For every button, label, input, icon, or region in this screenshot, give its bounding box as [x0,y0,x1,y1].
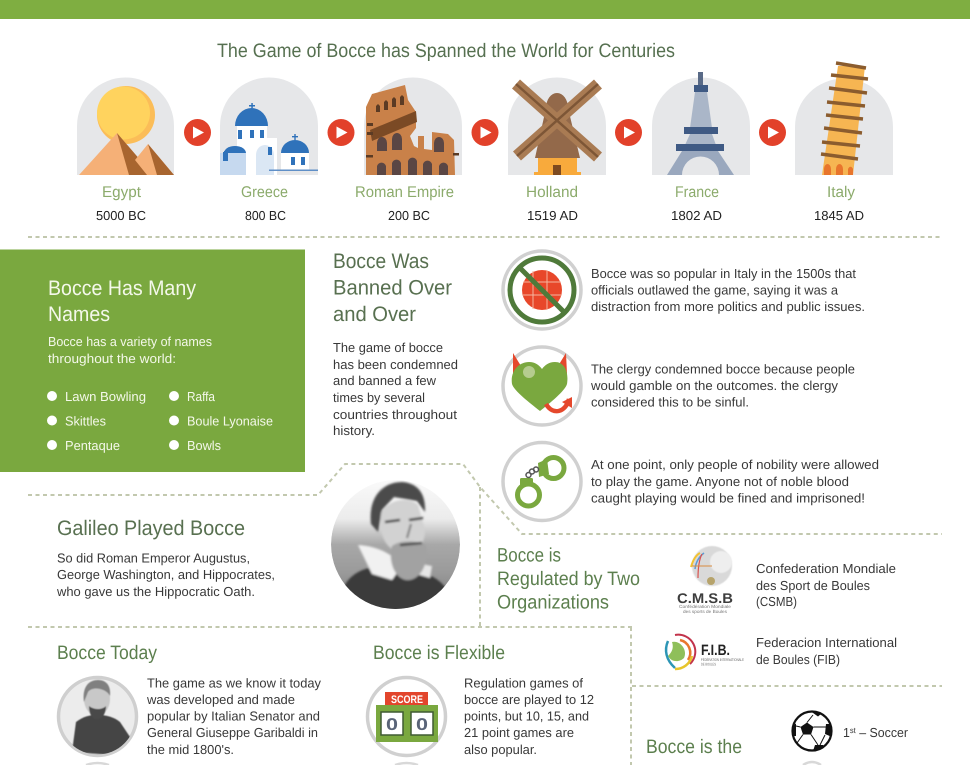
arrow: Greece to Rome [328,119,354,146]
logo: CMSB: C.M.S.B [677,590,733,606]
text: CMSB name: des Sport de Boules [756,578,870,593]
icon: Holland windmill [508,77,606,175]
label: Greece 800 BC: Greece [241,184,288,201]
text: clergy condemned gambling: The clergy condemned bocce because people [591,362,855,376]
text: FIB name: de Boules (FIB) [756,652,840,667]
arrow: Rome to Holland [472,119,498,146]
logo: CMSB: Confédération Mondiale [679,604,732,609]
text: banned summary: has been condemned [333,357,458,372]
text: CMSB name: Confederation Mondiale [756,561,896,576]
heading: Galileo Played Bocce: Galileo Played Bocce [57,517,245,540]
text: banned summary: and banned a few [333,373,437,388]
text: banned summary [333,340,458,438]
text: FIB name [756,635,897,667]
logo: FIB: DE BOULES [701,662,716,666]
logo: FIB [666,635,744,669]
timeline: history of bocce [77,63,893,223]
text: intro to names: Bocce has a variety of names [48,334,212,349]
heading: Bocce Was Banned Over and Over: Banned Over [333,276,452,300]
heading: Bocce is Flexible: Bocce is Flexible [373,642,505,664]
label: Roman Empire 200 BC: 200 BC [388,208,430,223]
text: clergy condemned gambling: would gamble on the outcomes. the clergy [590,378,839,393]
text: other famous players [56,550,275,599]
icon: banned bocce ball [503,251,581,329]
text: CMSB name [756,561,896,609]
text: outlawed in the 1500s: Bocce was so popular in Italy in the 1500s that [591,266,856,281]
heading: Bocce Was Banned Over and Over: and Over [333,303,416,326]
list: names of bocce: Bowls [187,438,221,453]
icon: scoreboard [368,678,446,756]
text: nobility only [591,457,879,506]
heading: Bocce is Regulated by Two Organizations: Bocce is [497,544,561,566]
label: Italy 1845 AD [814,184,864,223]
logo: CMSB [677,546,733,614]
icon: Egypt pyramids [77,77,174,175]
text: Bocce Today description: the mid 1800's. [147,742,234,757]
text: nobility only: to play the game. Anyone not of noble blood [591,474,849,489]
label: Holland 1519 AD [526,184,578,223]
text: nobility only: At one point, only people of nobility were allowed [591,457,879,472]
portrait: Garibaldi [58,678,136,756]
text: other famous players: So did Roman Emperor Augustus, [57,550,250,566]
text: nobility only: caught playing would be fined and imprisoned! [591,490,865,506]
text: Bocce is Flexible description: Regulation games of [464,676,583,690]
label: Italy 1845 AD: 1845 AD [814,208,864,223]
icon: Italy leaning tower [795,63,893,175]
label: Roman Empire 200 BC [355,184,454,223]
text: outlawed in the 1500s [591,266,865,314]
label: Holland 1519 AD: Holland [526,184,578,201]
panel: Bocce Has Many Names [0,250,305,472]
heading: Bocce is Regulated by Two Organizations: Regulated by Two [497,568,640,590]
arrow: Holland to France [615,119,642,146]
text: Bocce Today description: was developed and made [146,692,295,707]
heading: Bocce Was Banned Over and Over: Bocce Was [333,250,429,273]
logo: CMSB: des sports de Boules [683,609,728,614]
label: Roman Empire 200 BC: Roman Empire [355,184,454,201]
label: Holland 1519 AD: 1519 AD [527,208,578,223]
icon: Roman Colosseum [364,77,462,175]
label: Egypt 5000 BC: 5000 BC [96,208,146,223]
icon: France Eiffel Tower [652,72,750,175]
list: names of bocce: Boule Lyonaise [187,414,273,428]
heading: Bocce is Regulated by Two Organizations: Organizations [497,592,609,614]
heading: Bocce Has Many Names [48,277,196,326]
text: outlawed in the 1500s: distraction from more politics and public issues. [591,299,865,314]
text: 1st Soccer: 1 [843,725,850,740]
list: names of bocce [47,389,273,453]
text: Bocce Today description: popular by Italian Senator and [147,708,320,724]
text: Bocce Today description: General Giuseppe Garibaldi in [147,725,318,740]
label: Egypt 5000 BC [96,184,146,223]
text: Bocce is Flexible description: 21 point games are [464,725,574,740]
text: intro to names [48,334,212,366]
text: clergy condemned gambling: considered this to be sinful. [591,394,749,410]
list: names of bocce: Pentaque [65,438,120,453]
icon: Greece domed churches [220,77,318,175]
heading: Bocce Today: Bocce Today [57,642,157,664]
logo: FIB: F.I.B. [701,642,730,659]
icon: scoreboard: 0 [416,715,428,734]
label: Greece 800 BC: 800 BC [245,208,286,223]
text: Bocce is Flexible description: bocce are played to 12 [464,692,594,707]
arrow: France to Italy [759,119,786,146]
list: names of bocce: Lawn Bowling [65,389,146,404]
heading: Bocce Has Many Names: Bocce Has Many [48,277,196,300]
icon: devil heart [503,347,581,425]
icon: soccer ball [792,712,832,751]
label: Italy 1845 AD: Italy [827,184,855,201]
heading: Bocce is Regulated by Two Organizations [497,544,640,614]
text: banned summary: The game of bocce [333,340,443,355]
icon: handcuffs [503,442,581,520]
text: clergy condemned gambling [590,362,855,410]
text: 1st Soccer: – Soccer [856,725,909,740]
label: France 1802 AD [671,184,722,223]
label: Egypt 5000 BC: Egypt [102,184,142,201]
title: The Game of Bocce has Spanned the World for Centuries [217,40,675,62]
text: 1st Soccer: st [850,726,857,735]
text: other famous players: who gave us the Hippocratic Oath. [56,584,255,599]
text: CMSB name: (CSMB) [756,594,797,609]
logo: FIB: FÉDÉRATION INTERNATIONALE [701,657,744,662]
text: Bocce Today description [146,676,321,757]
text: intro to names: throughout the world: [48,351,176,366]
label: Greece 800 BC [241,184,288,223]
text: other famous players: George Washington, and Hippocrates, [57,567,275,582]
list: names of bocce: Raffa [187,389,216,404]
top banner [0,0,970,19]
text: banned summary: times by several [333,390,425,405]
list: names of bocce: Skittles [65,414,106,428]
text: Bocce Today description: The game as we know it today [147,676,321,690]
text: banned summary: countries throughout [333,407,457,422]
icon: scoreboard: SCORE [391,694,423,706]
heading: Bocce is the: Bocce is the [646,736,742,758]
heading: Bocce Has Many Names: Names [48,303,110,326]
text: Bocce is Flexible description: also popular. [464,742,537,757]
label: France 1802 AD: 1802 AD [671,208,722,223]
text: Bocce is Flexible description: points, but 10, 15, and [464,708,589,724]
text: banned summary: history. [333,423,375,438]
text: Bocce is Flexible description [464,676,594,757]
text: outlawed in the 1500s: officials outlawed the game, saying it was a [591,282,839,298]
label: France 1802 AD: France [675,184,719,201]
icon: next row circles, cropped at the page edge [86,762,821,765]
heading: Bocce Was Banned Over and Over [333,250,452,326]
icon: scoreboard: 0 [386,715,398,734]
text: FIB name: Federacion International [756,635,897,650]
arrow: Egypt to Greece [184,119,211,146]
portrait: Galileo engraving [331,480,460,612]
